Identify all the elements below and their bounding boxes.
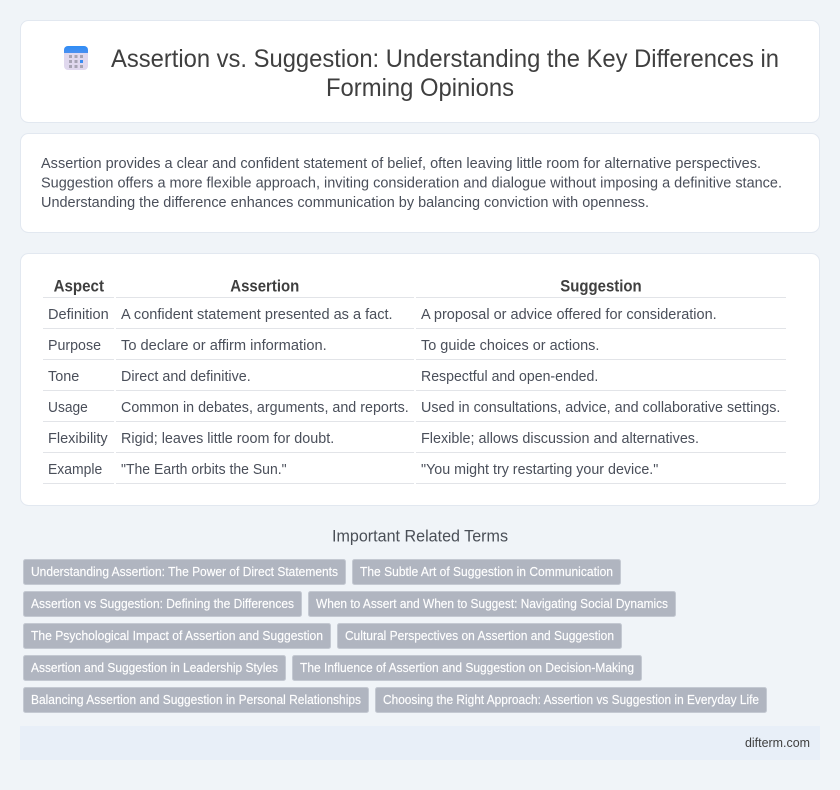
row: example: "The Earth orbits the Sun." bbox=[121, 462, 287, 478]
row: tone: Tone bbox=[48, 369, 79, 385]
row: example: Example bbox=[48, 462, 102, 478]
summary paragraph bbox=[41, 156, 782, 211]
tag bbox=[352, 560, 620, 584]
tag: Assertion vs Suggestion: Defining the Differences bbox=[31, 597, 294, 611]
row: usage bbox=[48, 400, 780, 416]
table header: Suggestion bbox=[560, 278, 642, 296]
tag: The Psychological Impact of Assertion and Suggestion bbox=[31, 629, 323, 643]
row: flexibility bbox=[48, 431, 699, 447]
row: usage: Common in debates, arguments, and reports. bbox=[121, 400, 409, 416]
heading: related terms: Important Related Terms bbox=[332, 528, 508, 546]
tag bbox=[24, 592, 302, 616]
icon: calendar bbox=[64, 46, 88, 70]
tag bbox=[24, 688, 368, 712]
tag bbox=[24, 656, 286, 680]
row: definition: A proposal or advice offered for consideration. bbox=[421, 307, 717, 323]
row: purpose: Purpose bbox=[48, 338, 101, 354]
summary paragraph: Understanding the difference enhances communication by balancing conviction with openness. bbox=[41, 195, 649, 211]
tag bbox=[24, 624, 330, 648]
row: flexibility: Flexibility bbox=[48, 431, 108, 447]
row: tone: Direct and definitive. bbox=[121, 369, 251, 385]
summary paragraph: Suggestion offers a more flexible approach, inviting consideration and dialogue without imposing a definitive stance. bbox=[41, 176, 782, 192]
panel: title bbox=[20, 20, 820, 122]
title text bbox=[111, 45, 779, 102]
title text: Forming Opinions bbox=[326, 74, 514, 102]
table header: Assertion bbox=[230, 278, 299, 296]
tag: Balancing Assertion and Suggestion in Personal Relationships bbox=[31, 693, 361, 707]
related term tags bbox=[24, 560, 766, 712]
panel: comparison table bbox=[20, 254, 820, 506]
tag: Assertion and Suggestion in Leadership Styles bbox=[31, 661, 278, 675]
footer: difterm.com bbox=[745, 736, 810, 750]
row: purpose: To declare or affirm information. bbox=[121, 338, 327, 354]
tag: The Subtle Art of Suggestion in Communication bbox=[360, 565, 613, 579]
panel: summary bbox=[20, 134, 820, 232]
tag: The Influence of Assertion and Suggestion on Decision-Making bbox=[300, 661, 634, 675]
row: example bbox=[48, 462, 658, 478]
table header bbox=[54, 278, 642, 296]
table header: Aspect bbox=[54, 278, 104, 296]
row: definition: Definition bbox=[48, 307, 109, 323]
tag bbox=[292, 656, 642, 680]
row: definition: A confident statement presented as a fact. bbox=[121, 307, 393, 323]
row: example: "You might try restarting your device." bbox=[421, 462, 658, 478]
row: tone bbox=[48, 369, 598, 385]
tag: Cultural Perspectives on Assertion and Suggestion bbox=[345, 629, 614, 643]
row: tone: Respectful and open-ended. bbox=[421, 369, 598, 385]
summary paragraph: Assertion provides a clear and confident statement of belief, often leaving little room for alternative perspectives. bbox=[41, 156, 761, 172]
row: flexibility: Flexible; allows discussion and alternatives. bbox=[421, 431, 699, 447]
row: usage: Used in consultations, advice, and collaborative settings. bbox=[421, 400, 780, 416]
tag bbox=[338, 624, 622, 648]
tag: Choosing the Right Approach: Assertion vs Suggestion in Everyday Life bbox=[383, 693, 759, 707]
row: purpose: To guide choices or actions. bbox=[421, 338, 599, 354]
tag bbox=[308, 592, 676, 616]
row: flexibility: Rigid; leaves little room for doubt. bbox=[121, 431, 334, 447]
footer bbox=[20, 726, 820, 760]
title text: Assertion vs. Suggestion: Understanding the Key Differences in bbox=[111, 45, 779, 73]
row: definition bbox=[48, 307, 717, 323]
tag bbox=[376, 688, 766, 712]
row: usage: Usage bbox=[48, 400, 88, 416]
tag: When to Assert and When to Suggest: Navigating Social Dynamics bbox=[316, 597, 668, 611]
tag: Understanding Assertion: The Power of Direct Statements bbox=[31, 565, 338, 579]
tag bbox=[24, 560, 346, 584]
row: purpose bbox=[48, 338, 599, 354]
